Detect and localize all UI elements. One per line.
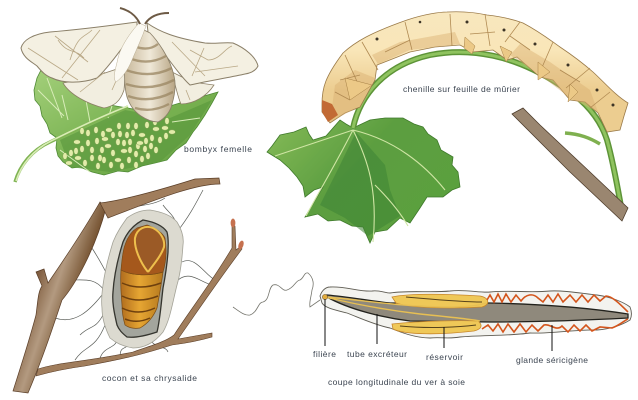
chrysalis abdomen <box>121 270 163 328</box>
chrysalis head and wings <box>121 225 166 275</box>
silk thread <box>233 273 320 315</box>
leaf stem <box>15 107 128 182</box>
moth hind wings <box>63 66 214 108</box>
longitudinal section of silkworm <box>233 273 632 338</box>
silk threads <box>55 190 215 360</box>
label: chenille sur feuille de mûrier: chenille sur feuille de mûrier <box>403 84 520 94</box>
bud tip upper <box>231 218 235 228</box>
gut <box>327 295 628 322</box>
cocoon and chrysalis illustration <box>13 178 245 393</box>
head <box>322 100 338 122</box>
moth right forewing <box>147 23 258 85</box>
label: glande séricigène: glande séricigène <box>516 355 588 365</box>
prolegs <box>345 37 578 102</box>
leader line: glande séricigène <box>551 325 553 351</box>
label: filière: filière <box>313 349 336 359</box>
lower silk gland squiggle <box>482 319 628 332</box>
leader line: filière <box>324 299 326 346</box>
antennae <box>120 8 169 24</box>
wing veins <box>28 30 238 100</box>
label: bombyx femelle: bombyx femelle <box>184 144 252 154</box>
leaf shaded lobe <box>320 132 400 236</box>
cocoon shell <box>102 210 183 348</box>
egg cluster <box>63 118 175 169</box>
body segment lines <box>335 14 610 108</box>
caterpillar on mulberry leaf illustration <box>267 12 628 243</box>
cocoon cavity <box>113 220 168 337</box>
upper branch <box>100 178 220 218</box>
label: réservoir: réservoir <box>426 352 463 362</box>
moth left forewing <box>21 22 137 82</box>
label: cocon et sa chrysalide: cocon et sa chrysalide <box>102 373 197 383</box>
abdomen stripes <box>126 44 174 110</box>
spinneret <box>322 294 328 300</box>
lower silk reservoir <box>392 321 481 334</box>
leaf stalk <box>353 52 622 212</box>
leader line: tube excréteur <box>376 314 378 344</box>
side shoot <box>565 133 600 144</box>
abdomen rings <box>122 283 161 321</box>
mulberry leaf <box>267 118 460 243</box>
worm outline <box>320 287 632 338</box>
label: tube excréteur: tube excréteur <box>347 349 407 359</box>
thorax white fold <box>114 23 146 82</box>
mulberry leaf under moth <box>34 70 218 175</box>
spiracles <box>376 20 614 106</box>
moth body <box>125 28 175 122</box>
twig <box>512 108 628 221</box>
upper silk gland squiggle <box>487 294 628 312</box>
label: coupe longitudinale du ver à soie: coupe longitudinale du ver à soie <box>328 377 465 387</box>
leaf dark lower area <box>60 100 212 172</box>
moth on leaf illustration <box>15 8 258 182</box>
leaf veins <box>275 130 445 242</box>
leaf veins <box>38 78 200 172</box>
leader line: réservoir <box>443 327 445 348</box>
upper silk reservoir <box>392 294 488 308</box>
bud tip lower <box>237 240 245 250</box>
excretory tubes <box>325 297 486 321</box>
caterpillar body <box>322 12 628 132</box>
lower branch and right twig <box>36 226 242 376</box>
chrysalis yellow outline <box>135 227 164 272</box>
branch main trunk <box>13 202 106 393</box>
worm underside shading <box>330 32 598 122</box>
